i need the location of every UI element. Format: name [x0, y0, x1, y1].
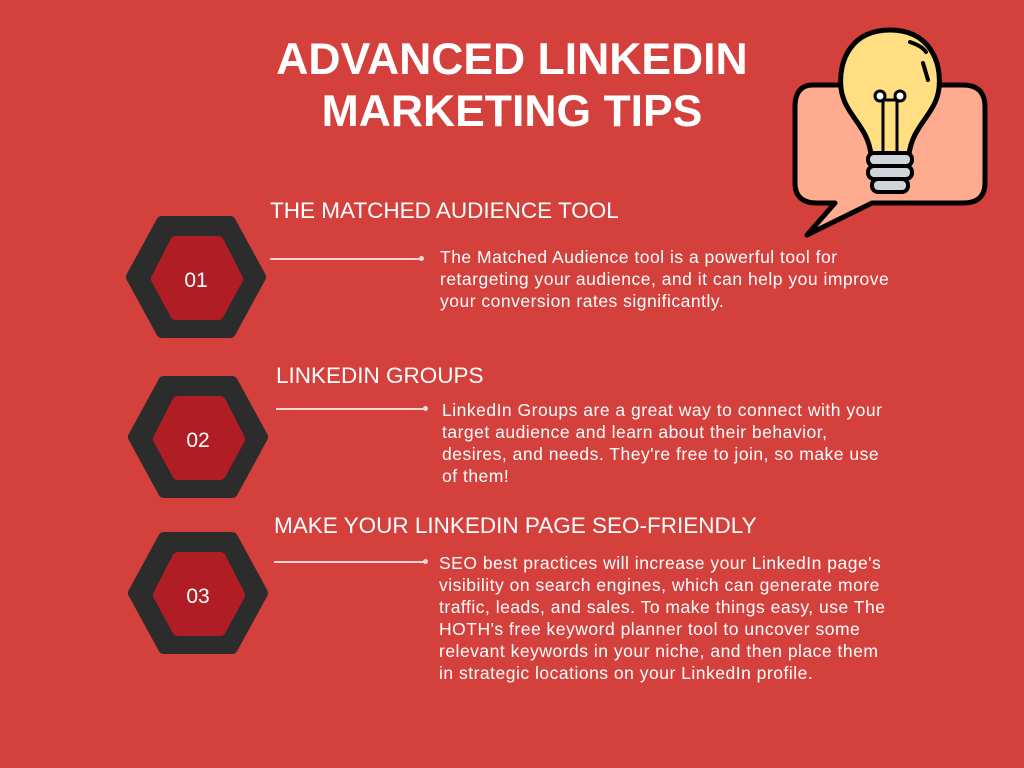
text: relevant keywords in your niche, and then place them — [439, 641, 878, 661]
panel: tip 3 — [128, 513, 885, 683]
text: traffic, leads, and sales. To make things easy, use The — [439, 597, 885, 617]
icon: hexagon 01 — [126, 216, 266, 338]
text: target audience and learn about their behavior, — [442, 422, 827, 442]
arrow — [270, 258, 422, 260]
arrow — [276, 408, 426, 410]
text: SEO best practices will increase your LinkedIn page's — [439, 553, 881, 573]
text: retargeting your audience, and it can help you improve — [440, 269, 889, 289]
title: ADVANCED LINKEDIN — [276, 35, 748, 84]
text: The Matched Audience tool is a powerful tool for — [440, 247, 838, 267]
icon: hexagon 02 — [128, 376, 268, 498]
text — [442, 400, 882, 486]
arrow — [274, 561, 426, 562]
panel: tip 2 — [128, 363, 882, 498]
icon: hexagon 03: 03 — [186, 585, 210, 608]
text: of them! — [442, 466, 509, 486]
text: desires, and needs. They're free to join, so make use — [442, 444, 879, 464]
icon: hexagon 02: 02 — [186, 429, 210, 452]
text: your conversion rates significantly. — [440, 291, 724, 311]
text — [439, 553, 885, 683]
heading: LINKEDIN GROUPS — [276, 363, 484, 388]
text: visibility on search engines, which can generate more — [439, 575, 880, 595]
text: in strategic locations on your LinkedIn profile. — [439, 663, 813, 683]
icon: hexagon 03 — [128, 532, 268, 654]
icon: hexagon 01: 01 — [184, 269, 208, 292]
icon: lightbulb in speech bubble — [792, 28, 988, 238]
title — [276, 35, 748, 136]
panel: tip 1 — [126, 198, 889, 338]
text — [440, 247, 889, 311]
heading: THE MATCHED AUDIENCE TOOL — [270, 198, 619, 223]
text: HOTH's free keyword planner tool to uncover some — [439, 619, 860, 639]
heading: MAKE YOUR LINKEDIN PAGE SEO-FRIENDLY — [274, 513, 757, 538]
text: LinkedIn Groups are a great way to connect with your — [442, 400, 882, 420]
title: MARKETING TIPS — [322, 87, 702, 136]
